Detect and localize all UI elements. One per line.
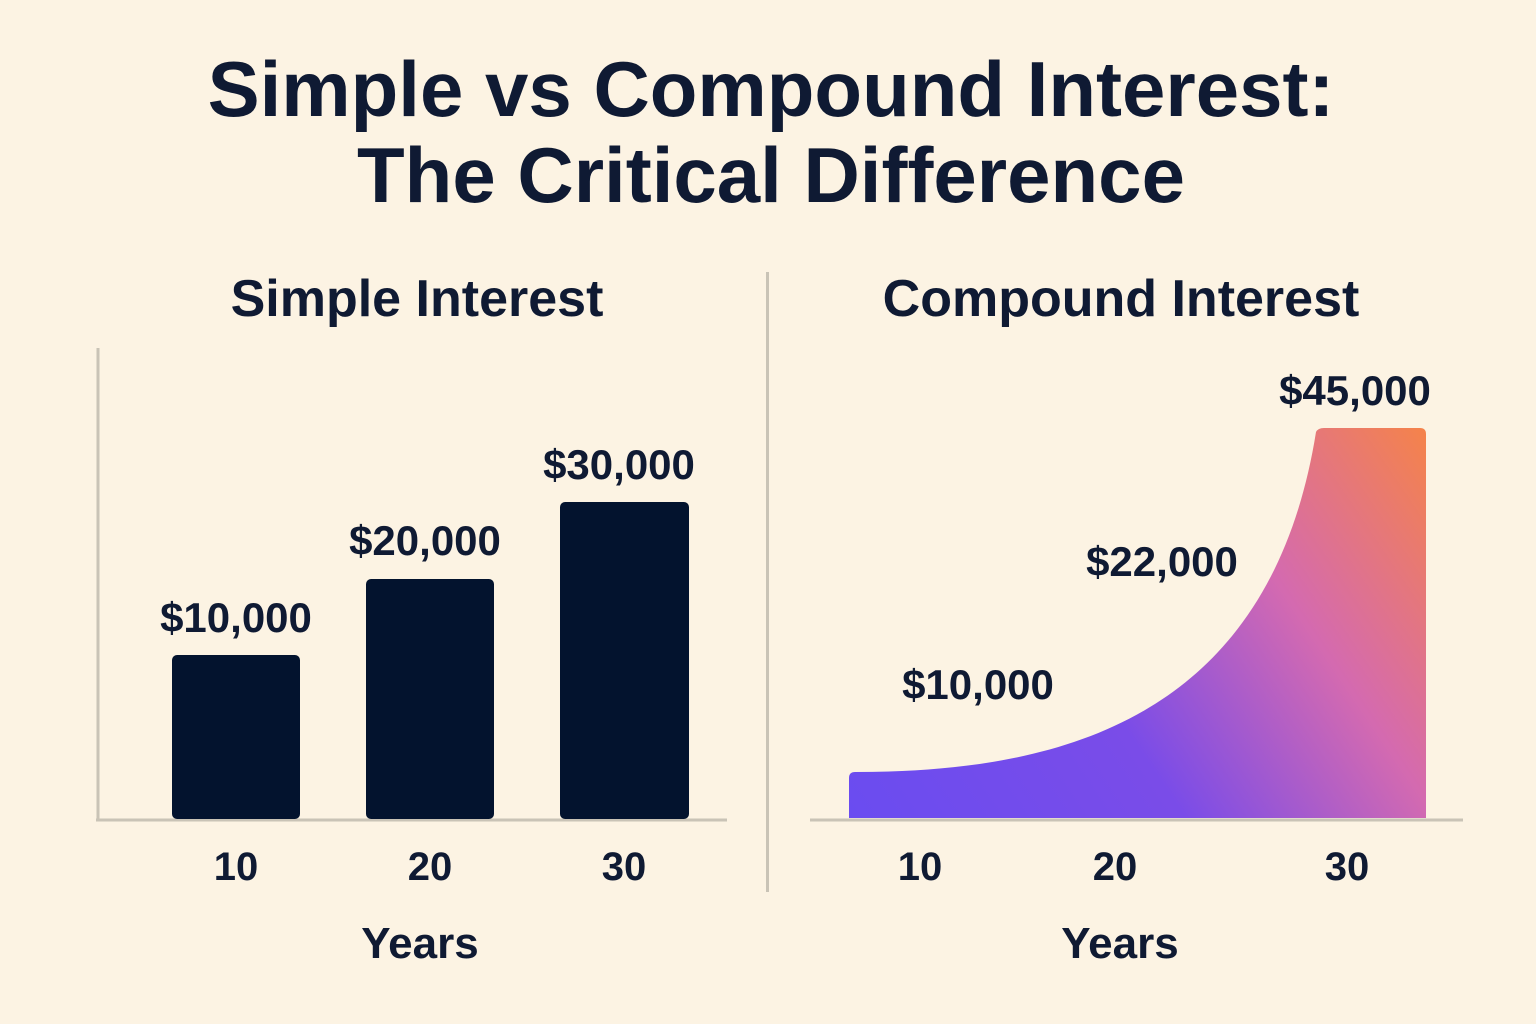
area chart: compound interest: $10,000 <box>902 661 1054 708</box>
area chart: compound interest: Years <box>1061 919 1179 968</box>
area chart: compound interest: 20 <box>1093 845 1137 889</box>
bar chart: simple interest: 30 <box>602 845 646 889</box>
title: The Critical Difference <box>357 131 1185 219</box>
divider <box>766 272 769 892</box>
area chart: compound interest: $45,000 <box>1279 367 1431 414</box>
bar chart: simple interest <box>96 348 727 968</box>
area chart: compound interest: 10 <box>898 845 942 889</box>
bar chart: simple interest: 20 <box>408 845 452 889</box>
bar chart: simple interest: $20,000 <box>349 517 501 564</box>
bar chart: simple interest: Years <box>361 919 479 968</box>
bar chart: simple interest: $10,000 <box>160 594 312 641</box>
heading: compound interest: Compound Interest <box>883 270 1359 328</box>
area chart: compound interest <box>810 367 1463 968</box>
panel: simple interest <box>96 270 727 968</box>
panel: compound interest <box>810 270 1463 968</box>
area chart: compound interest: $22,000 <box>1086 538 1238 585</box>
title: Simple vs Compound Interest: <box>208 45 1334 133</box>
bar chart: simple interest: $30,000 <box>543 441 695 488</box>
bar chart: simple interest: 10 <box>214 845 258 889</box>
heading: simple interest: Simple Interest <box>231 270 603 328</box>
title <box>208 45 1334 219</box>
area chart: compound interest: 30 <box>1325 845 1369 889</box>
